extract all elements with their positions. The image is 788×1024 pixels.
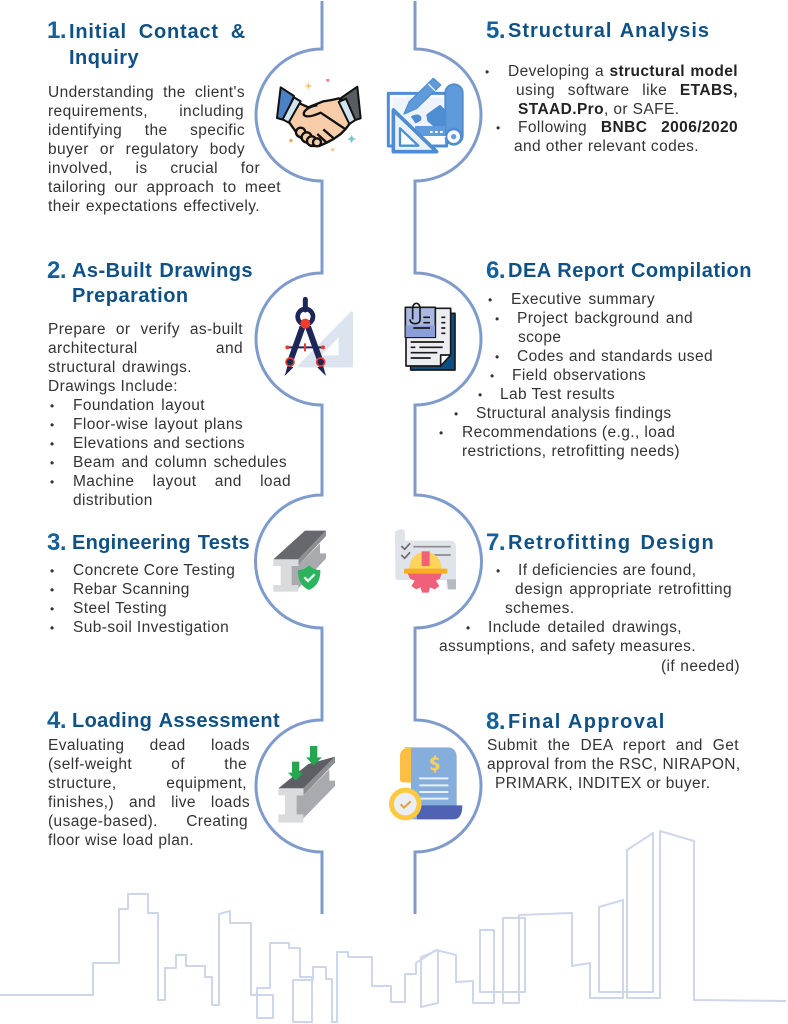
list: structural analysis points: • <box>485 65 489 79</box>
list: tests: • <box>50 602 54 616</box>
heading: step 1: Initial Contact & <box>69 21 246 43</box>
heading: step 1 <box>47 17 246 69</box>
list: structural analysis points: using software like ETABS, <box>516 82 738 99</box>
text: step 2 description and drawing list: Machine layout and load <box>73 473 291 490</box>
text: step 1 description: tailoring our approach to meet <box>48 179 281 196</box>
list: report contents <box>439 291 713 460</box>
list: report contents: • <box>488 293 492 307</box>
text: step 4 description: structure, equipment, <box>48 775 247 792</box>
list: retrofitting points: • <box>496 564 500 578</box>
list: tests: Rebar Scanning <box>73 581 190 598</box>
panel: step 3 engineering tests <box>47 529 250 636</box>
list: report contents: Executive summary <box>511 291 655 308</box>
list: tests: • <box>50 583 54 597</box>
list: tests: Steel Testing <box>73 600 167 617</box>
text: step 8 description <box>487 737 741 792</box>
list: tests: • <box>50 621 54 635</box>
heading: step 5: Structural Analysis <box>508 20 710 42</box>
text: step 1 description: their expectations effectively. <box>48 198 260 215</box>
heading: step 1: Inquiry <box>69 47 139 69</box>
list: structural analysis points: and other relevant codes. <box>514 138 699 155</box>
list: tests <box>50 562 235 636</box>
list: tests: Sub-soil Investigation <box>73 619 229 636</box>
heading: step 7: Retrofitting Design <box>508 532 715 554</box>
text: step 2 description and drawing list: Floor-wise layout plans <box>73 416 243 433</box>
list: structural analysis points: Following BNBC 2006/2020 <box>518 119 738 136</box>
text: step 2 description and drawing list: Foundation layout <box>73 397 205 414</box>
list: structural analysis points <box>485 63 738 155</box>
heading: step 2: As-Built Drawings <box>72 260 253 282</box>
list: report contents: restrictions, retrofitting needs) <box>462 443 680 460</box>
heading: step 1: 1. <box>47 17 66 44</box>
heading: step 4: 4. <box>47 707 66 734</box>
list: tests: • <box>50 564 54 578</box>
list: retrofitting points <box>439 562 740 675</box>
list: retrofitting points: design appropriate retrofitting <box>515 581 732 598</box>
text: step 1 description: requirements, including <box>48 103 244 120</box>
heading: step 2 <box>47 257 253 307</box>
panel: step 8 final approval <box>486 708 741 792</box>
text: step 4 description <box>48 737 250 849</box>
list: report contents: • <box>454 407 458 421</box>
list: report contents: scope <box>518 329 561 346</box>
list: retrofitting points: (if needed) <box>661 658 740 675</box>
text: step 8 description: approval from the RSC, NIRAPON, <box>487 756 741 773</box>
heading: step 3: 3. <box>47 529 66 556</box>
text: step 1 description: Understanding the client's <box>48 84 245 101</box>
list: report contents: • <box>490 369 494 383</box>
list: report contents: Field observations <box>512 367 646 384</box>
text: step 2 description and drawing list: • <box>50 437 54 451</box>
text: step 4 description: (self-weight of the <box>48 756 247 773</box>
text: step 1 description: involved, is crucial for <box>48 160 260 177</box>
list: report contents: Lab Test results <box>500 386 615 403</box>
list: retrofitting points: • <box>466 621 470 635</box>
text: step 2 description and drawing list <box>48 321 291 509</box>
list: report contents: • <box>478 388 482 402</box>
text: step 4 description: (usage-based). Creating <box>48 813 248 830</box>
list: report contents: Project background and <box>517 310 693 327</box>
text: step 2 description and drawing list: distribution <box>73 492 153 509</box>
panel: step 5 structural analysis <box>485 17 738 155</box>
list: report contents: • <box>495 350 499 364</box>
text: step 2 description and drawing list: Prepare or verify as-built <box>48 321 243 338</box>
text: step 8 description: PRIMARK, INDITEX or buyer. <box>495 775 710 792</box>
heading: step 3: Engineering Tests <box>72 532 250 554</box>
text: step 4 description: floor wise load plan. <box>48 832 194 849</box>
list: tests: Concrete Core Testing <box>73 562 235 579</box>
panel: step 4 loading assessment <box>47 707 280 849</box>
text: step 2 description and drawing list: Elevations and sections <box>73 435 245 452</box>
heading: step 8: 8. <box>486 708 505 735</box>
list: report contents: Recommendations (e.g., load <box>462 424 675 441</box>
heading: step 7: 7. <box>486 529 505 556</box>
panel: step 7 retrofitting design <box>439 529 740 675</box>
panel: step 6 DEA report compilation <box>439 257 752 460</box>
list: structural analysis points: Developing a structural model <box>508 63 738 80</box>
text: step 1 description: buyer or regulatory body <box>48 141 245 158</box>
text: step 2 description and drawing list: • <box>50 418 54 432</box>
heading: step 4: Loading Assessment <box>72 710 280 732</box>
heading: step 2: 2. <box>47 257 66 284</box>
list: retrofitting points: assumptions, and safety measures. <box>439 638 696 655</box>
text: step 2 description and drawing list: • <box>50 475 54 489</box>
text: step 4 description: finishes,) and live loads <box>48 794 250 811</box>
text: step 1 description: identifying the specific <box>48 122 245 139</box>
text: step 2 description and drawing list: Drawings Include: <box>48 378 178 395</box>
heading: step 6: DEA Report Compilation <box>508 260 752 282</box>
text: step 2 description and drawing list: structural drawings. <box>48 359 192 376</box>
heading: step 6: 6. <box>486 257 505 284</box>
list: retrofitting points: If deficiencies are found, <box>518 562 696 579</box>
text: step 2 description and drawing list: architectural and <box>48 340 243 357</box>
text: step 2 description and drawing list: • <box>50 399 54 413</box>
panel: step 1 initial contact <box>47 17 281 215</box>
list: retrofitting points: Include detailed drawings, <box>488 619 682 636</box>
list: retrofitting points: schemes. <box>505 600 575 617</box>
text: step 1 description <box>48 84 281 215</box>
list: report contents: • <box>495 312 499 326</box>
text: step 2 description and drawing list: Beam and column schedules <box>73 454 287 471</box>
list: report contents: Structural analysis findings <box>476 405 672 422</box>
panel: step 2 as-built drawings <box>47 257 291 509</box>
list: report contents: Codes and standards used <box>517 348 713 365</box>
text: step 8 description: Submit the DEA report and Get <box>487 737 739 754</box>
text: step 2 description and drawing list: • <box>50 456 54 470</box>
list: structural analysis points: • <box>496 121 500 135</box>
list: structural analysis points: STAAD.Pro, or SAFE. <box>518 101 679 118</box>
list: report contents: • <box>439 426 443 440</box>
heading: step 2: Preparation <box>72 285 189 307</box>
text: step 4 description: Evaluating dead loads <box>48 737 250 754</box>
heading: step 8: Final Approval <box>508 711 666 733</box>
heading: step 5: 5. <box>486 17 505 44</box>
